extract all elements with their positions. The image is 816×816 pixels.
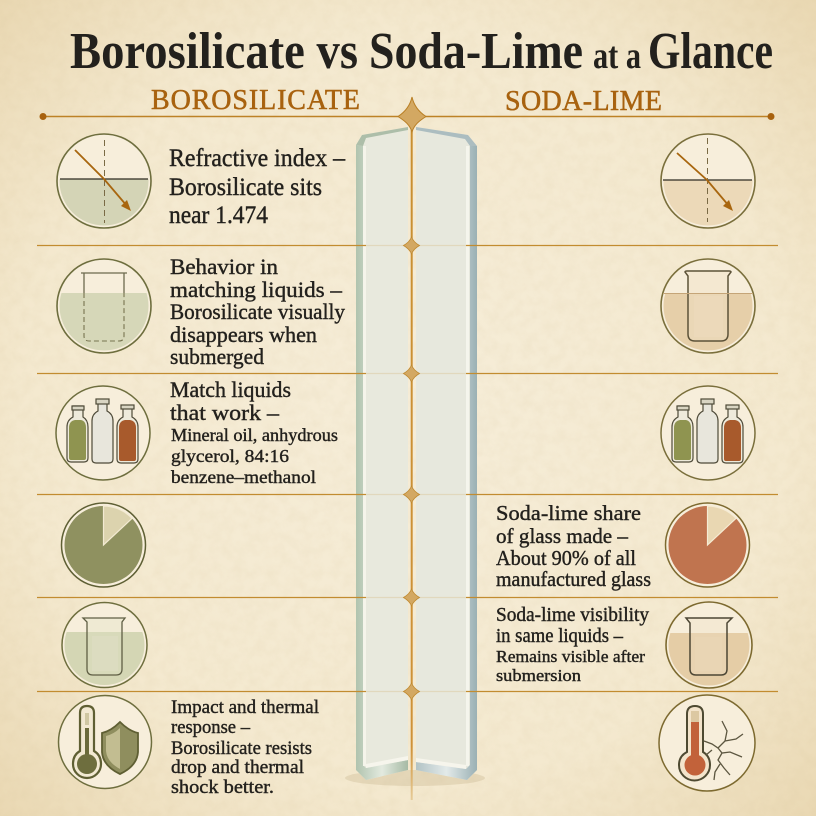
column heading: borosilicate: BOROSILICATE [151,85,360,116]
text: behavior in matching liquids: Borosilicate visually [170,299,346,324]
title: at a [593,35,641,77]
text: refractive index: Refractive index – [169,145,345,172]
glass veil over dividers [366,146,466,756]
text: refractive index [169,145,345,229]
text: soda-lime share: About 90% of all [496,546,636,570]
right glass pane [416,127,477,780]
icon: three bottles, soda-lime [661,386,755,480]
text: match liquids: that work – [170,400,280,425]
icon: thermometer and shield [58,696,152,788]
icon: refraction, borosilicate [57,134,151,229]
pie chart: soda-lime share [666,503,750,587]
left glass pane [356,127,408,780]
icon: beaker, soda-lime [664,602,756,689]
title: Soda-Lime [369,23,583,80]
text: behavior in matching liquids: matching liquids – [170,277,343,302]
text: impact and thermal response: drop and thermal [171,757,304,778]
text: impact and thermal response: response – [171,717,250,738]
text: refractive index: Borosilicate sits [169,174,322,201]
text: match liquids: benzene–methanol [171,467,316,487]
pie chart: borosilicate share [62,503,146,587]
text: match liquids: Match liquids [170,377,291,402]
icon: three bottles, borosilicate [56,386,150,480]
text: soda-lime visibility: Soda-lime visibility [496,605,649,626]
text: behavior in matching liquids [170,254,346,369]
column heading: soda-lime: SODA-LIME [505,86,662,117]
text: soda-lime share [496,501,651,591]
row dividers [37,246,778,692]
text: refractive index: near 1.474 [169,202,268,229]
text: behavior in matching liquids: Behavior in [170,254,278,279]
text: soda-lime share: manufactured glass [496,567,651,591]
icon: beaker, borosilicate [60,602,150,688]
title: Glance [648,23,773,80]
text: impact and thermal response: Borosilicate resists [171,738,312,759]
text: impact and thermal response [171,697,319,798]
text: match liquids: glycerol, 84:16 [171,446,289,466]
text: behavior in matching liquids: disappears when [170,322,317,347]
text: soda-lime visibility: Remains visible after [496,647,645,666]
central spine with diamonds [398,97,426,800]
icon: refraction, soda-lime [661,134,755,230]
text: soda-lime share: Soda-lime share [496,501,641,525]
text: soda-lime visibility [496,605,649,685]
title [70,23,773,80]
text: match liquids [170,377,338,487]
icon: thermometer and crack [659,695,755,791]
text: match liquids: Mineral oil, anhydrous [171,425,338,445]
glass panel [345,127,485,786]
text: impact and thermal response: shock better. [171,777,274,798]
text: soda-lime visibility: submersion [496,666,582,685]
text: impact and thermal response: Impact and thermal [171,697,319,718]
title: Borosilicate vs [70,23,358,80]
icon: beaker visible, soda-lime [661,259,755,353]
text: soda-lime share: of glass made – [496,524,628,548]
icon: beaker disappearing, borosilicate [57,259,151,353]
text: soda-lime visibility: in same liquids – [496,626,623,647]
header rule [40,113,774,120]
text: behavior in matching liquids: submerged [170,344,264,369]
